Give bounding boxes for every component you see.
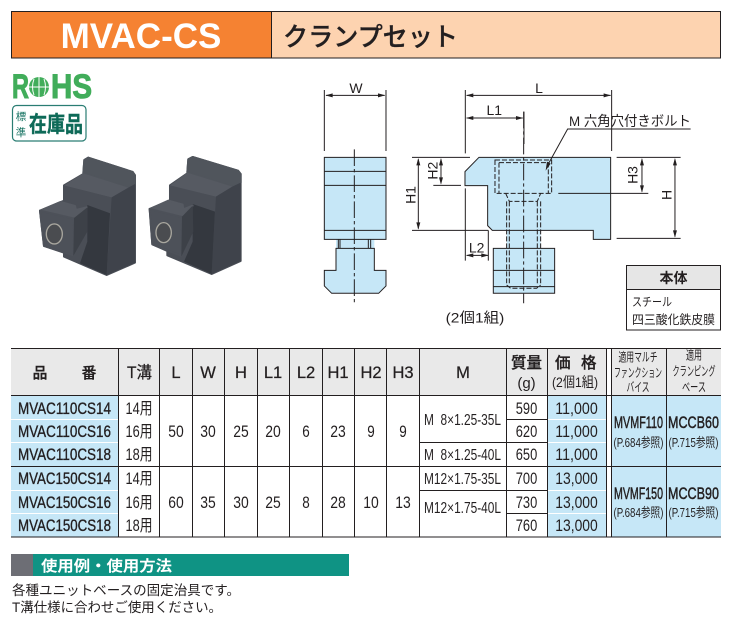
price column: 13,000: [555, 470, 598, 488]
table header row: 適用: [686, 348, 702, 362]
dimensions, first group: 6: [302, 423, 310, 441]
part numbers: MVAC150CS18: [18, 517, 111, 535]
mass column: [516, 400, 537, 535]
mass column: 590: [516, 400, 537, 418]
icon: RoHS logo: [12, 68, 92, 106]
mass column: 700: [516, 470, 537, 488]
dimension lines: L1: [487, 102, 502, 118]
T-slot column: [126, 400, 152, 535]
material box: 四三酸化鉄皮膜: [632, 312, 715, 327]
icon: standard stock badge: 在庫品: [29, 112, 83, 137]
dimensions, second group: 10: [363, 494, 379, 512]
mass column: 760: [516, 517, 537, 535]
material description: スチール: [632, 295, 672, 309]
mass column: 730: [516, 494, 537, 512]
part numbers: MVAC110CS18: [18, 446, 111, 464]
table header row: H2: [360, 364, 382, 382]
part numbers: MVAC150CS16: [18, 494, 111, 512]
dimension lines: L: [535, 80, 543, 96]
header banner: [12, 12, 720, 58]
price column: 11,000: [555, 423, 598, 441]
part numbers: MVAC110CS16: [18, 423, 111, 441]
compatible multifunction vises and clamping bases: (P.715参照): [668, 435, 718, 450]
dimensions, second group: 60: [168, 494, 184, 512]
icon: standard stock badge: [12, 106, 86, 141]
usage section heading: [11, 554, 349, 576]
icon: standard stock badge: 標: [16, 110, 27, 123]
dimensions, second group: [168, 494, 411, 512]
T-slot column: 14用: [126, 470, 152, 488]
dimensions, second group: 13: [395, 494, 411, 512]
bolt sizes: M12×1.75-40L: [424, 500, 501, 517]
price column: 11,000: [555, 446, 598, 464]
callout: hex socket bolt: M 六角穴付きボルト: [569, 113, 691, 129]
table header row: L2: [297, 364, 315, 382]
usage description: 各種ユニットベースの固定治具です。: [12, 583, 240, 598]
icon: RoHS logo: HS: [51, 68, 92, 106]
note: two pieces per set: (2個1組): [446, 310, 504, 326]
dimensions, second group: 25: [265, 494, 281, 512]
table header row: (g): [517, 375, 536, 392]
dimensions, second group: 8: [302, 494, 310, 512]
dimension lines: L2: [469, 239, 485, 255]
table header row: 番: [81, 365, 97, 382]
T-slot column: 16用: [126, 423, 152, 441]
title: product name: クランプセット: [283, 22, 458, 52]
bolt sizes: M 8×1.25-40L: [424, 447, 501, 464]
table header row: ベース: [682, 380, 706, 394]
dimensions, first group: 50: [168, 423, 184, 441]
icon: standard stock badge: 準: [16, 126, 26, 139]
dimensions, first group: 25: [233, 423, 249, 441]
table header row: 質量: [511, 354, 542, 372]
dimensions, second group: 35: [200, 494, 216, 512]
price column: 13,000: [555, 494, 598, 512]
dimensions, second group: 28: [330, 494, 346, 512]
price column: 13,000: [555, 517, 598, 535]
dimension lines: H1: [402, 186, 418, 204]
dimensions, first group: 20: [265, 423, 281, 441]
dimensions, first group: 9: [399, 423, 407, 441]
table header row: (2個1組): [552, 374, 598, 390]
compatible multifunction vises and clamping bases: (P.684参照): [614, 435, 664, 450]
table header row: W: [200, 364, 216, 382]
table header row: 格: [581, 354, 597, 372]
material box: [626, 266, 720, 330]
photo: clamp set, right piece: [150, 157, 241, 274]
table grid: [11, 348, 721, 537]
table header row: M: [456, 364, 470, 382]
compatible multifunction vises and clamping bases: MCCB60: [668, 413, 719, 432]
dimensions, first group: [168, 423, 407, 441]
usage section heading: 使用例・使用方法: [41, 557, 172, 575]
compatible multifunction vises and clamping bases: MVMF150: [614, 484, 663, 503]
T-slot column: 16用: [126, 494, 152, 512]
technical drawing: [324, 80, 691, 326]
dimension lines: H3: [625, 166, 641, 184]
table backgrounds: [11, 348, 721, 537]
compatible multifunction vises and clamping bases: MVMF110: [614, 413, 663, 432]
mass column: 620: [516, 423, 537, 441]
mass column: 650: [516, 446, 537, 464]
front view: W: [349, 80, 363, 96]
part numbers: MVAC110CS14: [18, 400, 111, 418]
compatible multifunction vises and clamping bases: (P.715参照): [668, 505, 718, 520]
table header row: バイス: [626, 380, 650, 394]
table header row: L1: [264, 364, 282, 382]
photo: clamp set, left piece: [40, 158, 135, 275]
usage description: [12, 583, 240, 615]
dimensions, first group: 9: [367, 423, 375, 441]
compatible multifunction vises and clamping bases: [614, 413, 719, 520]
spec table: [11, 348, 721, 537]
table header row: L: [171, 364, 181, 382]
price column: [555, 400, 598, 535]
bolt sizes: M12×1.75-35L: [424, 471, 501, 488]
table header row: H1: [327, 364, 349, 382]
front view: [324, 80, 386, 303]
dimension lines: H: [658, 190, 674, 200]
part numbers: [18, 400, 111, 535]
table header row: 品: [32, 365, 48, 382]
part numbers: MVAC150CS14: [18, 470, 111, 488]
table header row: H: [235, 364, 247, 382]
dimension lines: H2: [424, 162, 440, 180]
side view: [465, 112, 611, 303]
dimension lines: [402, 80, 681, 261]
table header row: 適用マルチ: [618, 350, 658, 364]
dimensions, first group: 23: [330, 423, 346, 441]
bolt sizes: M 8×1.25-35L: [424, 412, 501, 429]
usage description: T溝仕様に合わせご使用ください。: [12, 599, 222, 615]
compatible multifunction vises and clamping bases: MCCB90: [668, 484, 719, 503]
table header row: クランピング: [672, 364, 716, 378]
bolt sizes: [424, 412, 501, 517]
table header row: 価: [555, 354, 571, 372]
table header row: ファンクション: [614, 366, 662, 380]
price column: 11,000: [555, 400, 598, 418]
T-slot column: 18用: [126, 517, 152, 535]
T-slot column: 14用: [126, 400, 152, 418]
callout: hex socket bolt: [546, 113, 691, 171]
icon: RoHS logo: R: [12, 68, 29, 106]
material heading: 本体: [660, 270, 688, 286]
dimensions, first group: 30: [200, 423, 216, 441]
title: model: MVAC-CS: [61, 17, 221, 56]
T-slot column: 18用: [126, 446, 152, 464]
dimensions, second group: 30: [233, 494, 249, 512]
table header row: [32, 348, 716, 394]
compatible multifunction vises and clamping bases: (P.684参照): [614, 505, 664, 520]
table header row: T溝: [127, 363, 152, 382]
table header row: H3: [392, 364, 414, 382]
